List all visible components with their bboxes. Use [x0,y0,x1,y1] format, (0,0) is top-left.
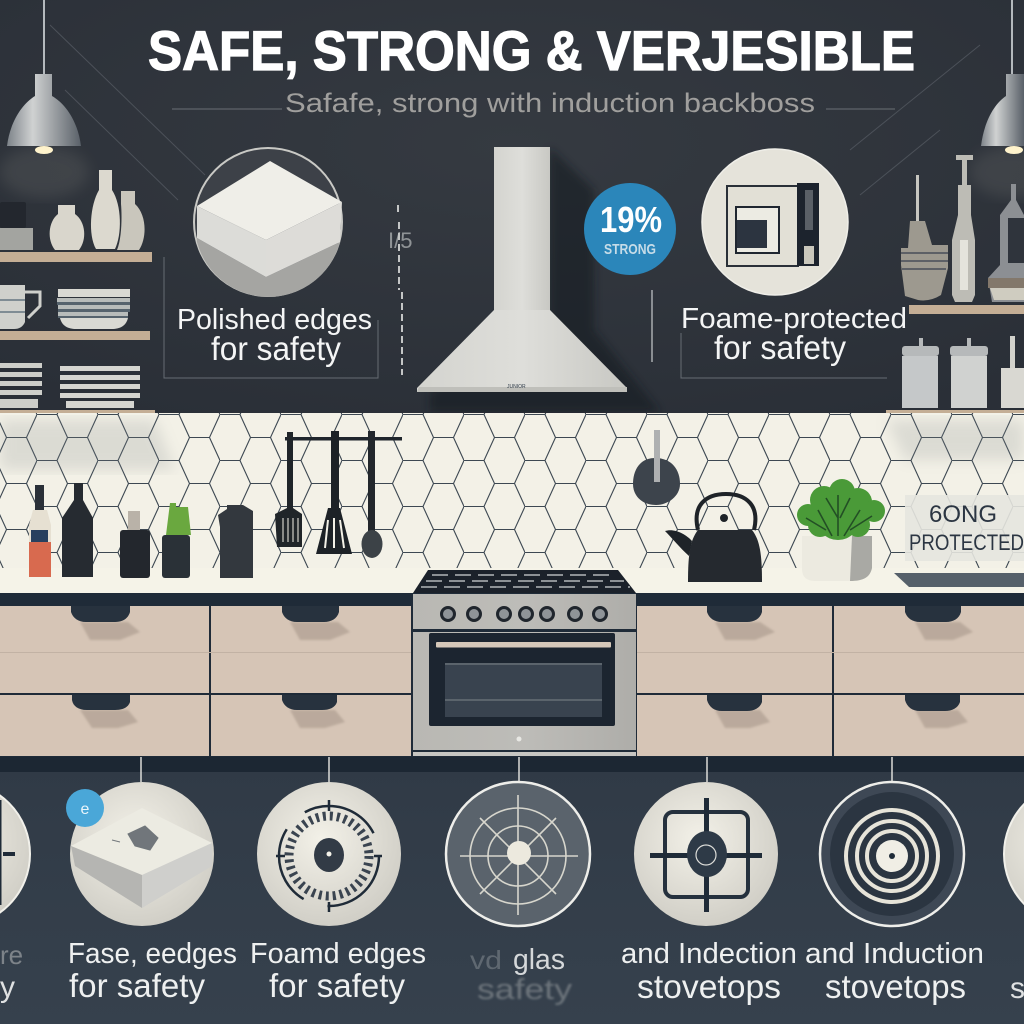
label [681,303,907,366]
label [177,304,372,367]
label: glass: safety [477,974,573,1006]
label: partial left: re [0,940,23,970]
hexagon tile backsplash [0,413,1024,571]
icon: dark jar [120,511,150,578]
left pendant lamp [0,0,89,198]
icon: black bottle [62,483,93,577]
label: induction [805,938,984,1005]
callout frame [164,257,378,378]
label: faded edges: for safety [69,967,205,1004]
feature icon: partial right disc [1004,782,1024,926]
label: for safety [211,330,341,367]
label: glass [470,944,573,1006]
label: foamed edges: Foamd edges [250,938,426,970]
left cabinet drawers [0,606,411,756]
label: induction: stovetops [825,968,966,1005]
sink tray [894,573,1024,587]
strength badge [584,183,676,275]
label: induction: and Induction [805,938,984,970]
icon: ladle [362,431,382,558]
feature icon: foam cube [66,782,214,926]
top-left feature: polished edges [164,148,378,378]
right cabinet drawers [637,606,1024,756]
label: faded edges: Fase, eedges [68,938,237,970]
callout frame [681,333,887,378]
icon: slotted turner [275,432,302,547]
label: foamed edges [250,938,426,1004]
counter edge [0,593,1024,606]
feature icon: glass burner [446,782,590,926]
oven door window [429,633,615,726]
label: foamed edges: for safety [269,967,405,1004]
subtitle: Safafe, strong with induction backboss [285,88,815,118]
shelf shadow [0,420,1024,470]
label: gas and induction: stovetops [637,968,781,1005]
left shelves with crockery [0,170,155,419]
top-right feature: foam protected [681,149,907,378]
stove range [413,570,636,756]
strength badge: 19% [600,199,662,240]
label: for safety [714,329,846,366]
cooktop grates [413,570,636,593]
label: partial left [0,940,23,1004]
icon: appliance in circle [702,149,848,295]
right pendant lamp [969,0,1024,198]
label: gas and induction: and Indection [621,938,797,970]
right shelves with jars and utensils [886,155,1024,419]
range hood [417,147,660,412]
hanging strings [141,757,892,782]
control panel [413,594,636,629]
counter bottles [29,483,253,578]
icon: spatula [316,431,352,554]
protected sign [905,495,1024,561]
lower shelf items [902,336,1024,408]
feature icon: partial left disc [0,782,30,926]
icon: dark jug [218,505,253,578]
label: partial left: y [0,971,15,1004]
kettle [665,494,762,582]
label: glass: vd [470,945,502,975]
feature icon: dial ring [257,782,401,926]
label: faded edges [68,938,237,1004]
feature icon: foam cube: e [81,801,90,818]
icon: red bottle [29,485,51,577]
feature icon: gas burner cross [634,782,778,926]
protected sign: 6ONG [929,501,997,528]
icon: polished cube [194,148,342,297]
label: Foame-protected [681,303,907,335]
label: glass: glas [513,944,565,976]
upper shelf items [901,155,1024,302]
range hood: JUNIOR [507,384,526,390]
potted plant [797,479,885,581]
label: Polished edges [177,304,372,336]
cabinets [0,606,1024,757]
background wall [0,0,1024,413]
feature icon: induction rings [820,782,964,926]
wall scribbles: I/5 [388,228,412,253]
strength badge: STRONG [604,241,656,258]
label: gas and induction [621,938,797,1005]
icon: green-top bottle [162,503,191,578]
hanging utensils [275,431,402,558]
shelf items: cup and plates [0,285,130,329]
oven body [413,632,636,750]
countertop [0,568,1024,593]
shelf items: plate stacks [0,363,140,408]
title: SAFE, STRONG & VERJESIBLE [148,19,915,82]
shelf items: vases and bowls [0,170,145,250]
handle shadows [80,622,973,728]
drawer handles [71,606,961,711]
wall pan [633,430,680,505]
lower dark band [0,757,1024,1024]
wall scribbles [388,205,652,375]
